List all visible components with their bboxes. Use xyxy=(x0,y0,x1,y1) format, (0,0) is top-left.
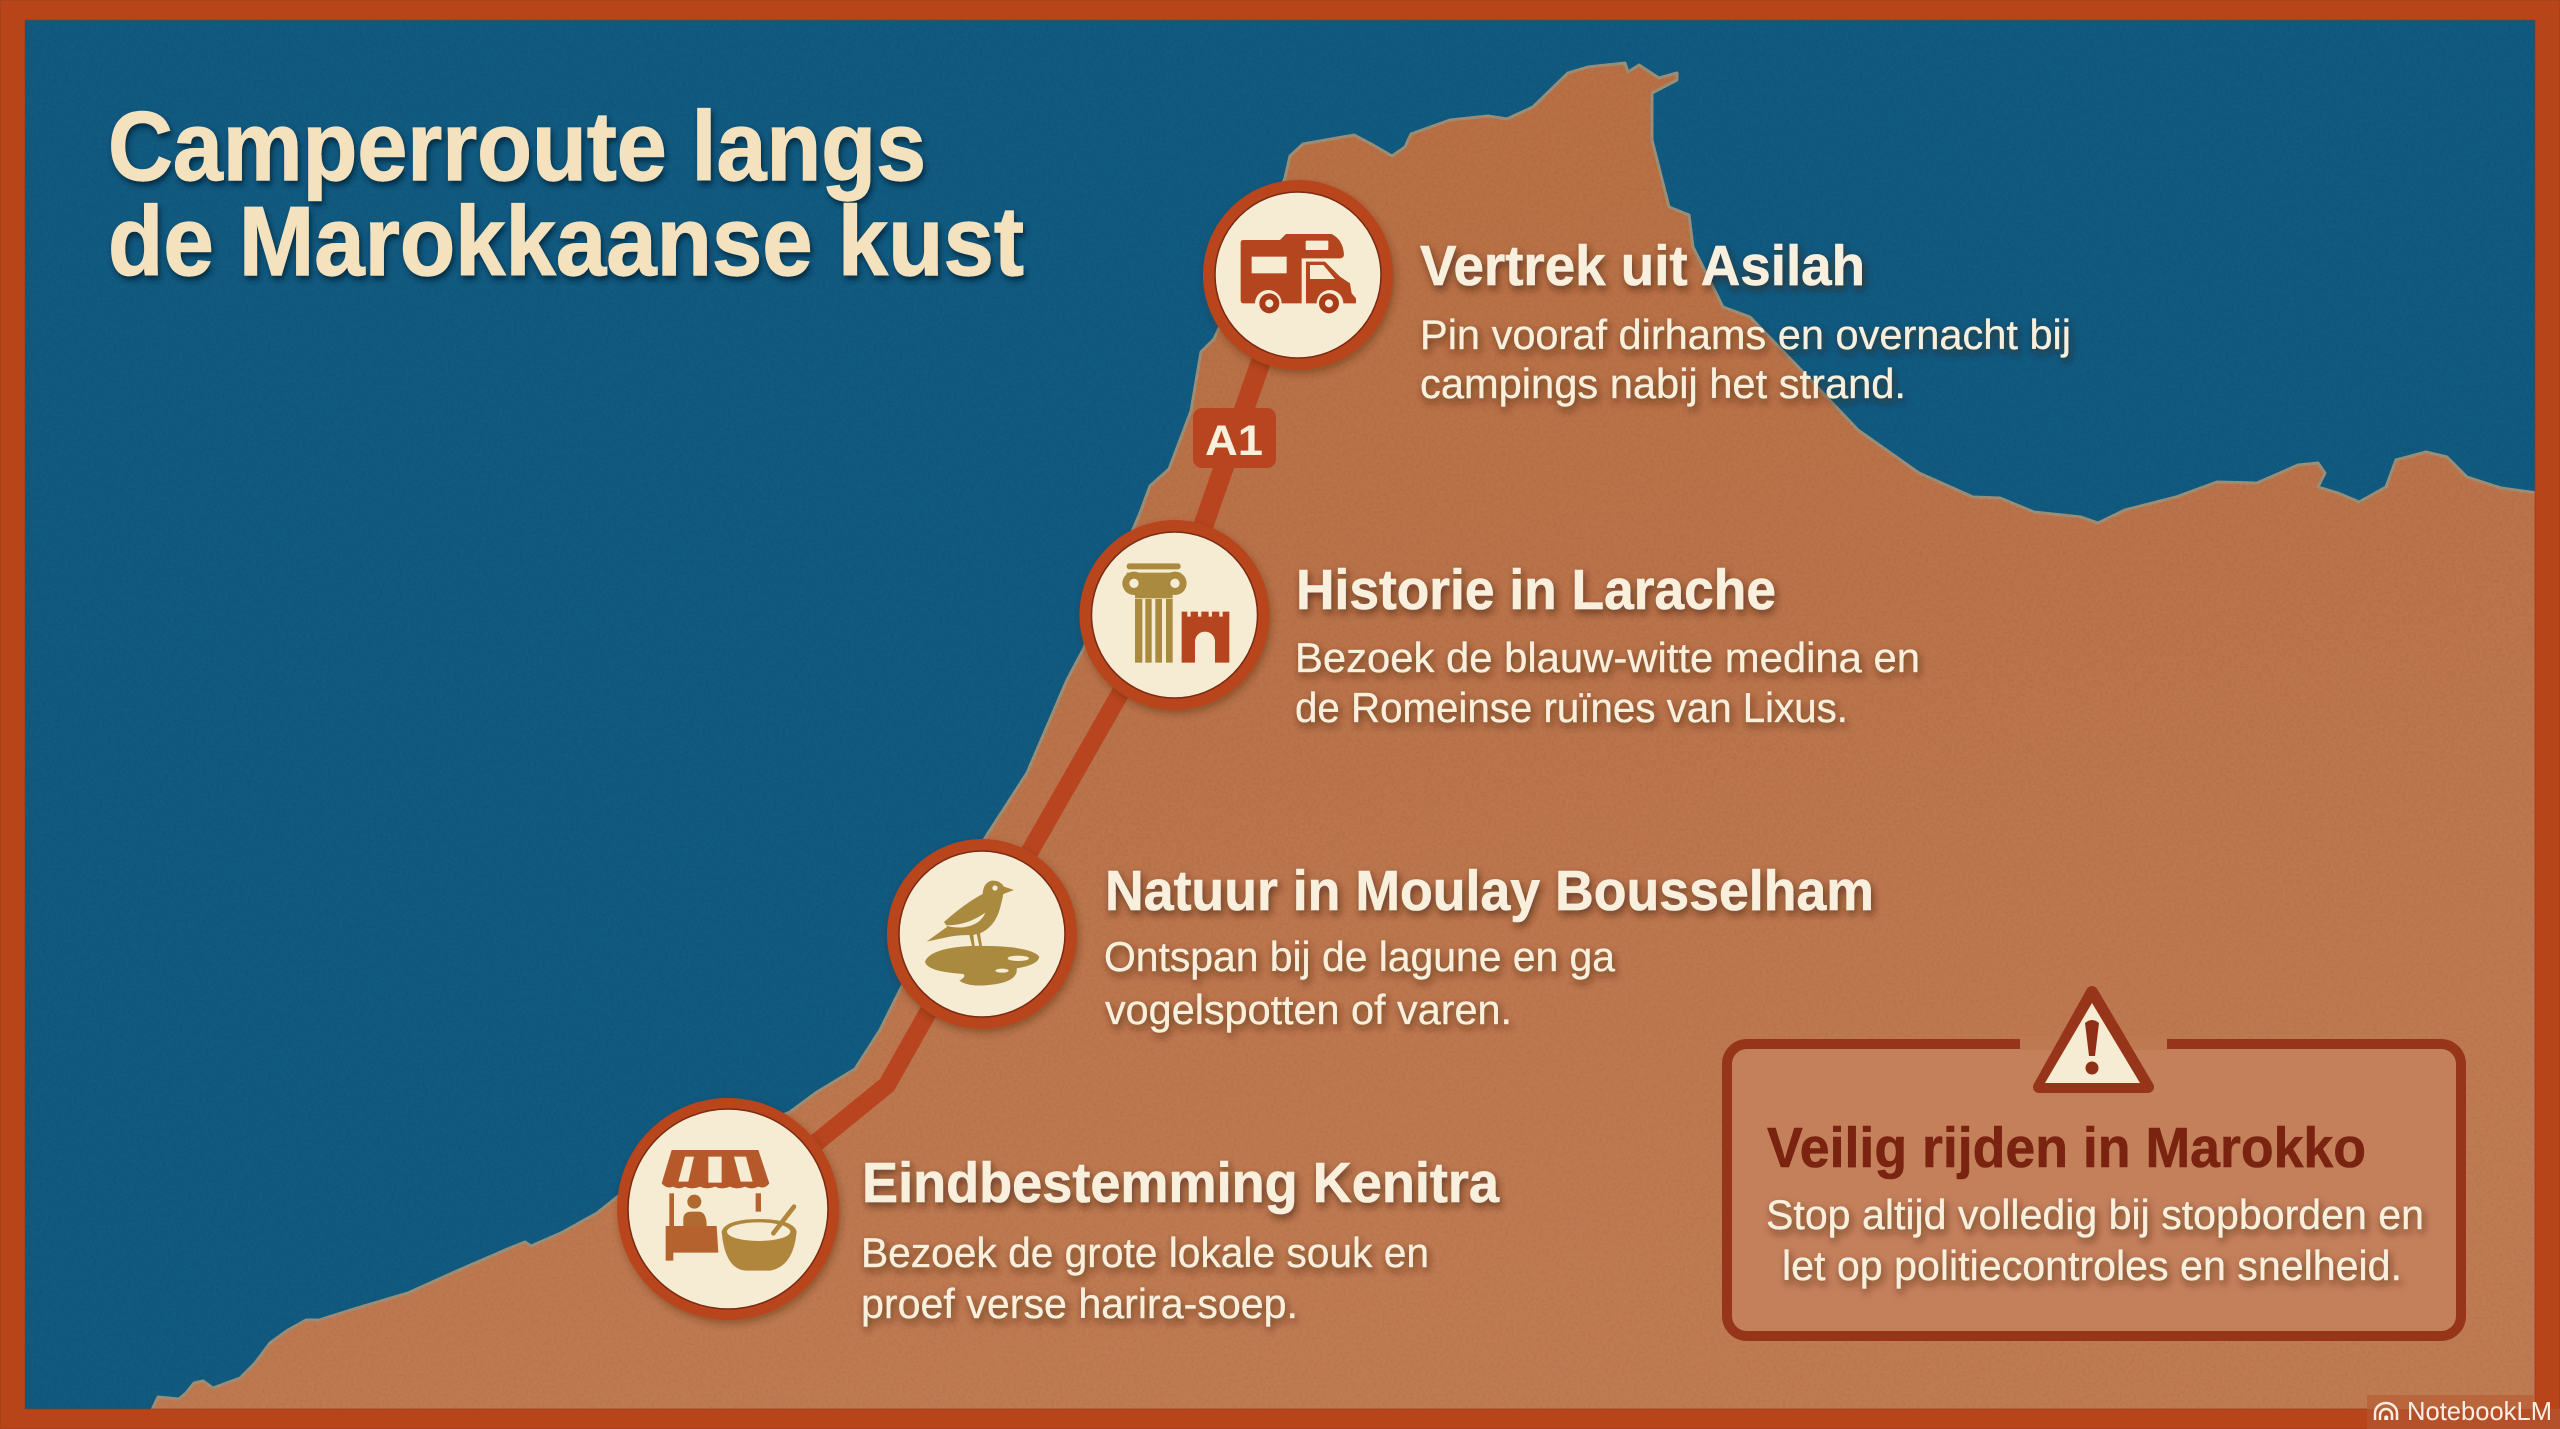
panel box xyxy=(1727,1044,2461,1336)
stop 3 description: vogelspotten of varen. xyxy=(1105,986,1512,1033)
NotebookLM watermark: NotebookLM xyxy=(2407,1396,2552,1426)
NotebookLM watermark xyxy=(2367,1395,2560,1429)
stop 3 heading: Natuur in Moulay Bousselham xyxy=(1105,859,1874,923)
stop 2 description xyxy=(1295,634,1920,731)
stop 1 description: campings nabij het strand. xyxy=(1420,360,1906,407)
icon: camper van xyxy=(1203,180,1393,370)
stop 4 description: Bezoek de grote lokale souk en xyxy=(861,1229,1429,1276)
icon: column and fortress xyxy=(1080,520,1270,710)
stop 3 description: Ontspan bij de lagune en ga xyxy=(1104,933,1616,980)
panel body text xyxy=(1766,1191,2424,1289)
icon: bird on lagoon xyxy=(887,839,1077,1029)
title: de Marokkaanse kust xyxy=(108,186,1024,296)
stop 4 description: proef verse harira-soep. xyxy=(861,1280,1298,1327)
stop 4 heading: Eindbestemming Kenitra xyxy=(862,1151,1500,1215)
title: Camperroute langs xyxy=(108,91,926,201)
route badge A1 xyxy=(1193,408,1276,468)
route line A1 xyxy=(795,350,1265,1160)
panel body text: let op politiecontroles en snelheid. xyxy=(1782,1242,2402,1289)
stop 2 description: Bezoek de blauw-witte medina en xyxy=(1295,634,1920,681)
stop 1 description xyxy=(1420,311,2071,407)
stop 2 description: de Romeinse ruïnes van Lixus. xyxy=(1295,684,1848,731)
title xyxy=(108,91,1024,296)
panel: safety callout xyxy=(1727,992,2461,1336)
stop 1 description: Pin vooraf dirhams en overnacht bij xyxy=(1420,311,2071,358)
stop 3 description xyxy=(1104,933,1616,1033)
stop 3: Moulay Bousselham xyxy=(887,839,1874,1033)
stop 4: Kenitra xyxy=(617,1098,1500,1327)
icon: market stall and soup bowl xyxy=(617,1098,839,1320)
panel body text: Stop altijd volledig bij stopborden en xyxy=(1766,1191,2424,1238)
panel heading: Veilig rijden in Marokko xyxy=(1767,1116,2366,1180)
stop 2: Larache xyxy=(1080,520,1920,731)
stop 1 heading: Vertrek uit Asilah xyxy=(1420,234,1865,298)
stop 2 heading: Historie in Larache xyxy=(1296,558,1776,622)
stop 4 description xyxy=(861,1229,1429,1327)
icon: warning triangle xyxy=(2039,992,2148,1087)
route badge A1: A1 xyxy=(1205,417,1263,465)
stop 1: Asilah xyxy=(1203,180,2071,407)
